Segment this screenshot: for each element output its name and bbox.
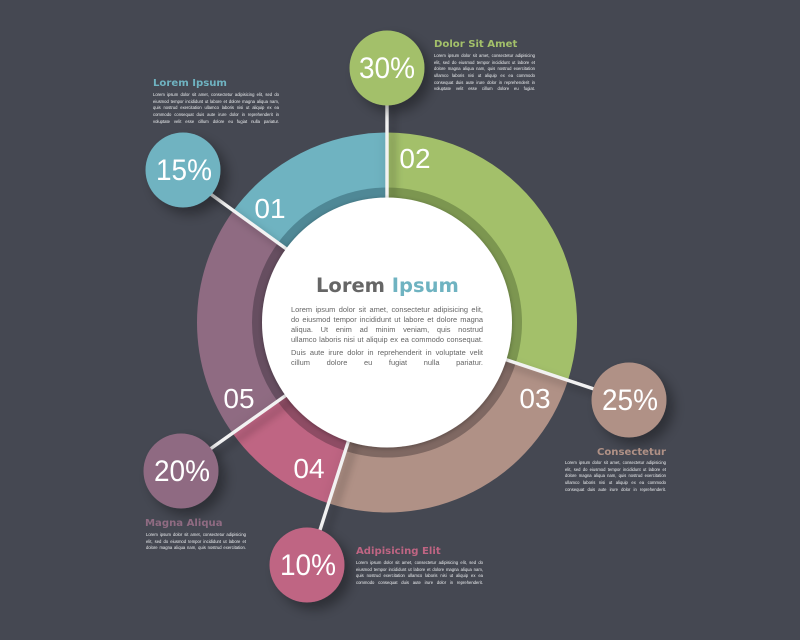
- text: Adipisicing Elit: commodo consequat duis aute irure dolor in reprehenderit.: [356, 580, 483, 585]
- text: Adipisicing Elit: eiusmod tempor incididunt ut labore et dolore magna aliqua nam,: [356, 567, 483, 572]
- badge: 15%: [146, 132, 220, 208]
- segment numbers: 05: [223, 383, 255, 414]
- center text block: [291, 305, 483, 367]
- segment numbers: 02: [399, 143, 431, 174]
- text: Lorem Ipsum: voluptate velit esse cillum dolore eu fugiat nulla pariatur.: [153, 119, 279, 124]
- text: Lorem Ipsum: quis nostrud exercitation ullamco laboris nisi ut aliquip ex ea: [153, 105, 279, 110]
- text: Lorem Ipsum: eiusmod tempor incididunt ut labore et dolore magna aliqua nam,: [153, 99, 279, 104]
- segment 04: [233, 322, 387, 503]
- segment 01: [233, 132, 387, 322]
- text: Adipisicing Elit: [356, 560, 483, 585]
- badge: 25%: 25%: [602, 384, 658, 417]
- text: Lorem Ipsum: commodo consequat duis aute irure dolor in reprehenderit in: [153, 112, 279, 117]
- badge: 10%: [270, 528, 344, 602]
- badge: 30%: [350, 30, 424, 106]
- text: Dolor Sit Amet: elit, sed do eiusmod tempor incididunt ut labore et: [434, 60, 535, 65]
- center text block: cillum dolore eu fugiat nulla pariatur.: [291, 358, 483, 367]
- connector lines: [205, 100, 600, 530]
- text: Dolor Sit Amet: consequat duis aute irure dolor in reprehenderit in: [434, 80, 535, 85]
- text: Dolor Sit Amet: [434, 53, 535, 91]
- badge: 20%: [144, 434, 218, 508]
- text: Adipisicing Elit: quis nostrud exercitation ullamco laboris nisi ut aliquip ex ea: [356, 573, 483, 578]
- badge: 25%: [592, 362, 666, 438]
- heading: Consectetur: Consectetur: [597, 447, 666, 458]
- center text block: do eiusmod tempor incididunt ut labore et dolore magna: [291, 315, 483, 324]
- badge: 30%: 30%: [359, 52, 415, 85]
- text: Adipisicing Elit: Lorem ipsum dolor sit amet, consectetur adipisicing elit, sed do: [356, 560, 483, 565]
- center white circle: [262, 198, 512, 448]
- heading: Lorem Ipsum: Lorem Ipsum: [153, 78, 227, 89]
- text: Consectetur: [565, 460, 666, 492]
- text: Magna Aliqua: elit, sed do eiusmod tempor incididunt ut labore et: [146, 539, 246, 544]
- text: Lorem Ipsum: [153, 92, 279, 124]
- badge: 10%: 10%: [280, 549, 336, 582]
- text: Magna Aliqua: dolore magna aliqua nam, quis nostrud exercitation.: [146, 545, 246, 550]
- segment 02: [387, 132, 577, 381]
- text: Consectetur: elit, sed do eiusmod tempor incididunt ut labore et: [565, 467, 666, 472]
- segment 03: [328, 322, 568, 512]
- heading: Dolor Sit Amet: Dolor Sit Amet: [434, 39, 517, 50]
- center heading: Lorem Ipsum: [316, 274, 459, 297]
- text: Dolor Sit Amet: Lorem ipsum dolor sit amet, consectetur adipisicing: [434, 53, 535, 58]
- segment numbers: 01: [254, 193, 286, 224]
- segment shadows: [233, 132, 387, 503]
- text: Lorem Ipsum: Lorem ipsum dolor sit amet, consectetur adipisicing elit, sed do: [153, 92, 279, 97]
- circular diagram: [144, 30, 676, 612]
- inner dark band: [252, 188, 522, 458]
- text: Dolor Sit Amet: ullamco laboris nisi ut aliquip ex ea commodo: [434, 73, 535, 78]
- center text block: ullamco laboris nisi ut aliquip ex ea commodo consequat.: [291, 335, 483, 344]
- heading: Magna Aliqua: Magna Aliqua: [145, 518, 223, 529]
- segment numbers: 03: [519, 383, 551, 414]
- badge: 20%: 20%: [154, 455, 210, 488]
- text: Consectetur: ullamco laboris nisi ut aliquip ex ea commodo: [565, 480, 666, 485]
- segment 05: [197, 211, 387, 434]
- text: Magna Aliqua: Lorem ipsum dolor sit amet, consectetur adipisicing: [146, 532, 246, 537]
- text: Magna Aliqua: [146, 532, 246, 550]
- text: Consectetur: dolore magna aliqua nam, quis nostrud exercitation: [565, 473, 666, 478]
- text: Dolor Sit Amet: dolore magna aliqua nam, quis nostrud exercitation: [434, 66, 535, 71]
- panel: ring segments: [197, 132, 577, 512]
- segment numbers: 04: [293, 453, 325, 484]
- text: Consectetur: consequat duis aute irure dolor in reprehenderit.: [565, 487, 666, 492]
- heading: Adipisicing Elit: Adipisicing Elit: [356, 546, 441, 557]
- text: Consectetur: Lorem ipsum dolor sit amet, consectetur adipisicing: [565, 460, 666, 465]
- text: Dolor Sit Amet: voluptate velit esse cillum dolore eu fugiat.: [434, 86, 535, 91]
- segment numbers: [223, 143, 551, 484]
- badge: 15%: 15%: [156, 154, 212, 187]
